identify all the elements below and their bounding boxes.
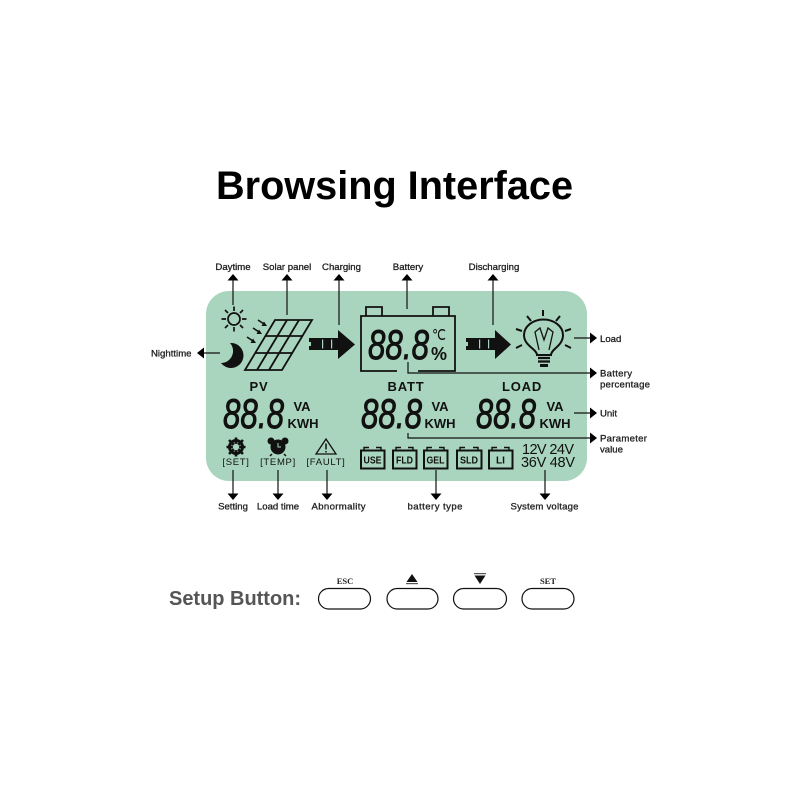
[SET] label: [SET]	[222, 457, 250, 468]
heading: PV: PV	[250, 379, 268, 394]
callout: System voltage: System voltage	[510, 502, 578, 512]
battery tag: SLD: SLD	[460, 454, 478, 466]
heading: BATT: BATT	[388, 379, 424, 394]
callout: Parameter value: value	[600, 444, 623, 456]
callout: Nighttime: Nighttime	[151, 348, 192, 360]
callout: Discharging: Discharging	[469, 262, 519, 273]
callout: Battery percentage	[408, 362, 650, 390]
battery tag: GEL: GEL	[426, 454, 445, 466]
icon: sun rays	[247, 320, 267, 343]
setup button label: Setup Button:	[169, 588, 301, 610]
callout: Load time: Load time	[257, 502, 299, 512]
callout: Battery percentage: Battery	[600, 368, 632, 380]
[FAULT] label: [FAULT]	[306, 457, 346, 468]
LOAD units: VA	[546, 399, 564, 414]
callout: Parameter value: Parameter	[600, 434, 648, 444]
callout: battery type: battery type	[408, 502, 462, 512]
PV units	[287, 399, 319, 431]
callout: battery type	[408, 470, 462, 512]
title: Browsing Interface	[216, 164, 573, 208]
battery tag: FLD	[393, 448, 416, 468]
callout: Nighttime	[151, 348, 220, 360]
callout: Solar panel: Solar panel	[263, 262, 311, 273]
icon: solar panel	[245, 320, 312, 370]
PV digits: 88.8	[223, 390, 284, 437]
percent sign: %	[431, 344, 447, 364]
callout: Battery: Battery	[393, 262, 423, 273]
panel: LCD display	[206, 291, 587, 481]
callout: Charging	[322, 262, 361, 325]
BATT units: KWH	[424, 416, 456, 431]
callout: Load	[574, 332, 621, 345]
callout: Charging: Charging	[322, 262, 361, 273]
PV units: KWH	[287, 416, 319, 431]
callout: Load: Load	[600, 334, 621, 345]
battery tag: USE	[361, 448, 384, 468]
callout: Setting	[218, 470, 248, 512]
button: ESC: ESC	[337, 576, 353, 586]
PV units: VA	[293, 399, 311, 414]
button: SET: SET	[540, 576, 556, 586]
callout: Discharging	[469, 262, 519, 325]
callout: Unit	[574, 408, 617, 420]
LOAD units: KWH	[539, 416, 571, 431]
button: up	[387, 574, 438, 609]
callout: Battery	[393, 262, 423, 309]
icon: sun	[222, 306, 246, 332]
callout: Abnormality: Abnormality	[312, 502, 366, 512]
battery tag: GEL	[424, 448, 448, 468]
battery tag: LI: LI	[496, 454, 505, 466]
callout: Setting: Setting	[218, 502, 248, 512]
battery tag: SLD	[457, 448, 482, 468]
button: ESC	[318, 576, 370, 609]
icon: battery frame	[361, 307, 455, 371]
LOAD digits: 88.8	[476, 390, 536, 437]
temperature unit: ℃	[432, 327, 446, 344]
callout: Unit: Unit	[600, 408, 617, 420]
BATT units	[424, 399, 456, 431]
icon: warning triangle	[316, 439, 336, 454]
callout: Abnormality	[312, 470, 366, 512]
BATT digits: 88.8	[361, 390, 422, 437]
[TEMP] label: [TEMP]	[260, 457, 296, 468]
system voltage options: 36V 48V	[521, 455, 575, 471]
system voltage options	[521, 442, 575, 471]
icon: moon	[221, 343, 243, 368]
button: SET	[522, 576, 574, 609]
icon: alarm clock	[268, 438, 288, 456]
callout: Solar panel	[263, 262, 311, 315]
battery tag: LI	[489, 448, 512, 468]
callout: Battery percentage: percentage	[600, 380, 650, 390]
callout: Parameter value	[408, 432, 648, 456]
heading: LOAD: LOAD	[502, 379, 542, 394]
icon: discharging arrow	[466, 330, 511, 359]
callout: Daytime	[215, 262, 251, 305]
system voltage options: 12V 24V	[522, 442, 574, 458]
LOAD units	[539, 399, 571, 431]
battery tag: USE: USE	[364, 454, 382, 466]
battery percentage digits: 88.8	[368, 321, 429, 368]
icon: gear	[226, 438, 246, 456]
callout: Daytime: Daytime	[215, 262, 251, 273]
BATT units: VA	[431, 399, 449, 414]
callout: System voltage	[510, 470, 578, 512]
button: down	[454, 573, 506, 609]
icon: light bulb	[516, 310, 571, 366]
icon: charging arrow	[309, 330, 355, 359]
callout: Load time	[257, 470, 299, 512]
battery tag: FLD: FLD	[396, 454, 413, 466]
